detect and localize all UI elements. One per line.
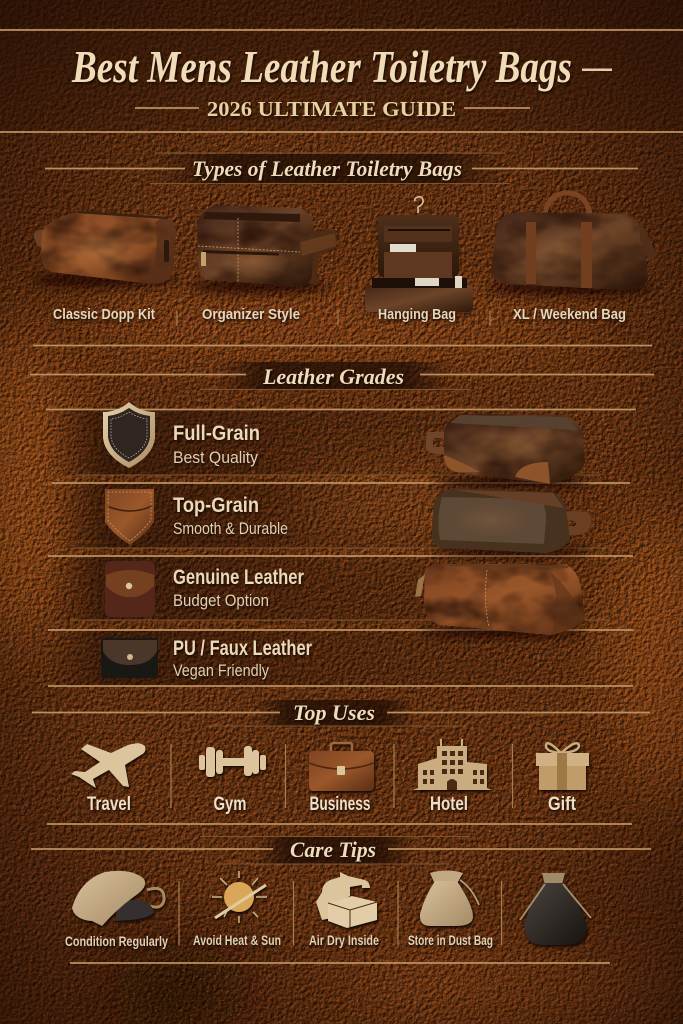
section: leather grades (30, 362, 654, 686)
title: Best Mens Leather Toiletry Bags (71, 42, 572, 92)
label: travel: Travel (87, 794, 131, 815)
header panel (0, 0, 683, 132)
row: genuine leather (105, 561, 587, 637)
label: avoid heat and sun: Avoid Heat & Sun (193, 932, 281, 948)
row: pu / faux leather (101, 637, 312, 680)
section: types of leather toiletry bags (31, 153, 657, 326)
icon: plane (71, 743, 146, 788)
label: xl / weekend bag: XL / Weekend Bag (513, 306, 626, 323)
text: genuine leather: Genuine Leather (173, 566, 304, 589)
text: pu / faux leather: PU / Faux Leather (173, 637, 312, 660)
label: condition regularly: Condition Regularly (65, 933, 168, 949)
label: gift: Gift (548, 794, 577, 815)
icon: shield (103, 402, 155, 468)
label: store in dust bag: Store in Dust Bag (408, 932, 493, 948)
bag: hanging bag (362, 197, 474, 315)
bag: top-grain (432, 488, 591, 556)
section: care tips (31, 836, 651, 949)
icon: black pouch (101, 638, 158, 678)
text: full-grain: Full-Grain (173, 422, 260, 445)
label: organizer style: Organizer Style (202, 306, 300, 323)
heading: types: Types of Leather Toiletry Bags (192, 156, 462, 181)
icon: hotel (413, 739, 492, 790)
title dash (582, 68, 612, 71)
text: top-grain: Top-Grain (173, 494, 259, 517)
subtitle rule right (464, 107, 530, 109)
row: full-grain (103, 402, 588, 488)
heading: care tips: Care Tips (290, 837, 376, 862)
icon: black dust bag (520, 873, 591, 945)
icon: air dry box (316, 872, 377, 928)
icon: sun crossed out (212, 871, 267, 923)
text: best quality: Best Quality (173, 448, 258, 467)
heading: leather grades: Leather Grades (262, 364, 404, 389)
heading: top uses: Top Uses (293, 700, 375, 725)
text: vegan friendly: Vegan Friendly (173, 661, 269, 680)
icon: gift (536, 743, 589, 790)
text: smooth and durable: Smooth & Durable (173, 519, 288, 538)
icon: towel on leather (72, 871, 164, 926)
text: budget option: Budget Option (173, 591, 269, 610)
label: hanging bag: Hanging Bag (378, 306, 456, 323)
bag: xl / weekend bag (486, 193, 657, 295)
bag: organizer style (190, 205, 337, 293)
subtitle rule left (135, 107, 199, 109)
icon: leather patch (105, 489, 154, 545)
label: classic dopp kit: Classic Dopp Kit (53, 306, 155, 323)
row: top-grain (105, 488, 591, 556)
section: top uses (32, 700, 650, 815)
icon: pouch (105, 561, 155, 617)
hook (415, 197, 423, 213)
label: air dry inside: Air Dry Inside (309, 932, 379, 948)
subtitle: 2026 ULTIMATE GUIDE (207, 97, 456, 121)
label: gym: Gym (214, 794, 246, 815)
bag: full-grain (426, 414, 588, 488)
bag: genuine leather (415, 564, 587, 637)
icon: dumbbell (199, 746, 266, 777)
label: hotel: Hotel (430, 794, 468, 815)
label: business: Business (310, 794, 370, 815)
icon: briefcase (309, 743, 374, 791)
row backgrounds (46, 410, 636, 686)
bag: classic dopp kit (31, 212, 179, 287)
icon: tan dust bag (420, 870, 479, 926)
